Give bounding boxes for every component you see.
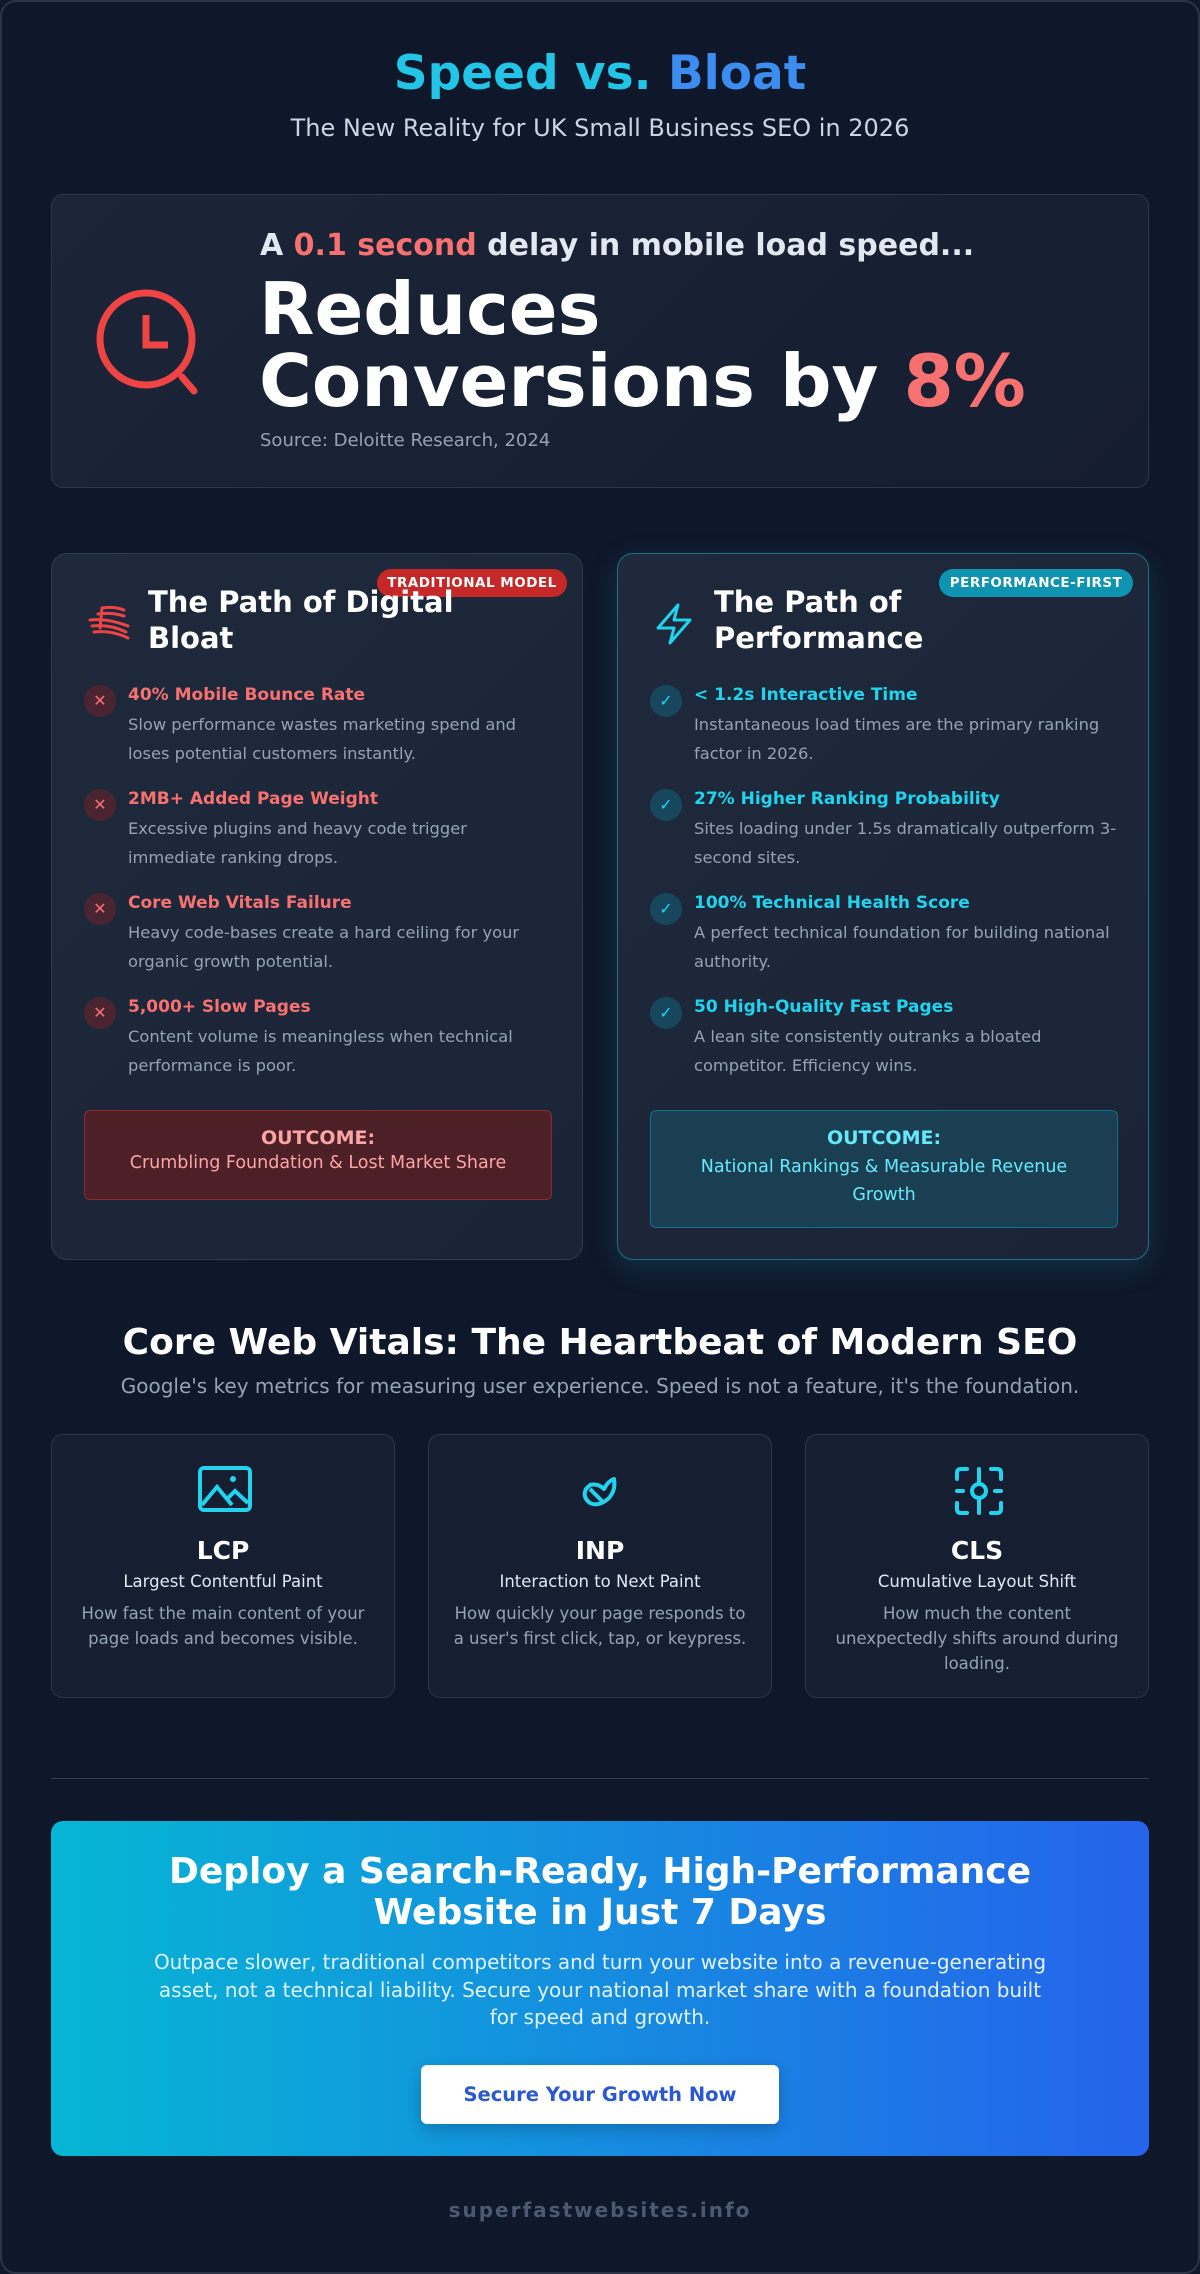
heading: The Path of Digital: [148, 585, 454, 619]
panel: performance: Sites loading under 1.5s dramatically outperform 3-second sites.: [694, 819, 1116, 867]
panel: performance: 100% Technical Health Score: [694, 893, 970, 913]
outcome box: OUTCOME:: [261, 1127, 375, 1149]
card: CLS: CLS: [951, 1536, 1003, 1565]
card: INP: [428, 1434, 772, 1698]
panel: bloat: ✕: [93, 1003, 107, 1022]
big stat: [259, 267, 1026, 423]
panel: bloat: Heavy code-bases create a hard ceiling for your organic growth potential.: [128, 923, 519, 971]
panel: bloat: Excessive plugins and heavy code trigger immediate ranking drops.: [128, 819, 467, 867]
panel: performance: [617, 553, 1149, 1260]
section subtitle: Google's key metrics for measuring user experience. Speed is not a feature, it's the foundation.: [121, 1374, 1079, 1398]
CTA button: [421, 2065, 779, 2124]
card: LCP: [51, 1434, 395, 1698]
subtitle: The New Reality for UK Small Business SEO in 2026: [291, 114, 909, 142]
panel: bloat: 40% Mobile Bounce Rate: [128, 685, 365, 705]
panel: bloat: ✕: [93, 795, 107, 814]
big stat: Conversions by 8%: [259, 339, 1026, 423]
outcome box: National Rankings & Measurable Revenue: [701, 1157, 1067, 1177]
icon: touch: [582, 1477, 616, 1506]
card: LCP: Largest Contentful Paint: [123, 1572, 323, 1591]
icon: bloat: [88, 606, 130, 640]
heading: Performance: [714, 621, 923, 655]
panel: performance: ✓: [659, 1003, 673, 1022]
CTA heading: Website in Just 7 Days: [374, 1892, 826, 1933]
icon: clock: [96, 290, 198, 394]
item 3: [84, 893, 520, 971]
card: CLS: How much the content unexpectedly shifts around during loading.: [836, 1604, 1118, 1673]
panel: bloat: [51, 553, 583, 1260]
card: INP: How quickly your page responds to a user's first click, tap, or keypress.: [454, 1604, 746, 1648]
panel: bloat: ✕: [93, 899, 107, 918]
panel: performance: 50 High-Quality Fast Pages: [694, 997, 953, 1017]
card: CLS: [805, 1434, 1149, 1698]
outcome box: [650, 1110, 1118, 1228]
item 4: [650, 997, 1042, 1075]
icon: image: [198, 1466, 252, 1512]
heading: Bloat: [148, 621, 233, 655]
badge: [939, 569, 1133, 597]
heading: The Path of: [714, 585, 901, 619]
footer: superfastwebsites.info: [449, 2198, 751, 2222]
icon: bolt: [656, 604, 692, 644]
panel: performance: A perfect technical foundation for building national authority.: [694, 923, 1110, 971]
outcome box: OUTCOME:: [827, 1127, 941, 1149]
outcome box: Crumbling Foundation & Lost Market Share: [130, 1153, 506, 1173]
panel: bloat: 5,000+ Slow Pages: [128, 997, 311, 1017]
card: LCP: How fast the main content of your page loads and becomes visible.: [82, 1604, 364, 1648]
card: INP: INP: [576, 1536, 624, 1565]
item 2: [84, 789, 467, 867]
panel: bloat: Content volume is meaningless when technical performance is poor.: [128, 1027, 513, 1075]
card: CLS: Cumulative Layout Shift: [878, 1572, 1076, 1591]
CTA heading: [169, 1851, 1031, 1933]
CTA heading: Deploy a Search-Ready, High-Performance: [169, 1851, 1031, 1892]
card: INP: Interaction to Next Paint: [499, 1572, 701, 1591]
panel: performance: ✓: [659, 795, 673, 814]
CTA text: Outpace slower, traditional competitors and turn your website into a revenue-generating asset, not a technical liability. Secure your national market share with a foundation built for speed and growth.: [154, 1950, 1046, 2029]
panel: bloat: Slow performance wastes marketing spend and loses potential customers instantly.: [128, 715, 516, 763]
panel: performance: < 1.2s Interactive Time: [694, 685, 917, 705]
heading: [148, 585, 454, 655]
item 3: [650, 893, 1110, 971]
card: LCP: LCP: [197, 1536, 249, 1565]
item 2: [650, 789, 1116, 867]
panel: performance: A lean site consistently outranks a bloated competitor. Efficiency wins.: [694, 1027, 1042, 1075]
badge: TRADITIONAL MODEL: [387, 575, 557, 591]
item 4: [84, 997, 513, 1075]
panel: performance: ✓: [659, 691, 673, 710]
item 1: [84, 685, 516, 763]
panel: bloat: Core Web Vitals Failure: [128, 893, 352, 913]
badge: [377, 569, 567, 597]
outcome box: Growth: [852, 1185, 916, 1205]
lead text: A 0.1 second delay in mobile load speed...: [260, 228, 974, 263]
item 1: [650, 685, 1099, 763]
hero stat card: [51, 194, 1149, 488]
big stat: Reduces: [259, 267, 600, 351]
panel: bloat: 2MB+ Added Page Weight: [128, 789, 378, 809]
heading: [714, 585, 923, 655]
panel: performance: Instantaneous load times are the primary ranking factor in 2026.: [694, 715, 1099, 763]
badge: PERFORMANCE-FIRST: [950, 575, 1122, 591]
outcome box: [84, 1110, 552, 1200]
panel: performance: 27% Higher Ranking Probability: [694, 789, 1000, 809]
title: Speed vs. Bloat: [394, 46, 806, 101]
icon: focus: [955, 1467, 1003, 1515]
CTA button: Secure Your Growth Now: [463, 2083, 737, 2106]
panel: performance: ✓: [659, 899, 673, 918]
CTA banner: [51, 1821, 1149, 2156]
source: Source: Deloitte Research, 2024: [260, 430, 550, 451]
panel: bloat: ✕: [93, 691, 107, 710]
section heading: Core Web Vitals: The Heartbeat of Modern SEO: [123, 1322, 1077, 1363]
